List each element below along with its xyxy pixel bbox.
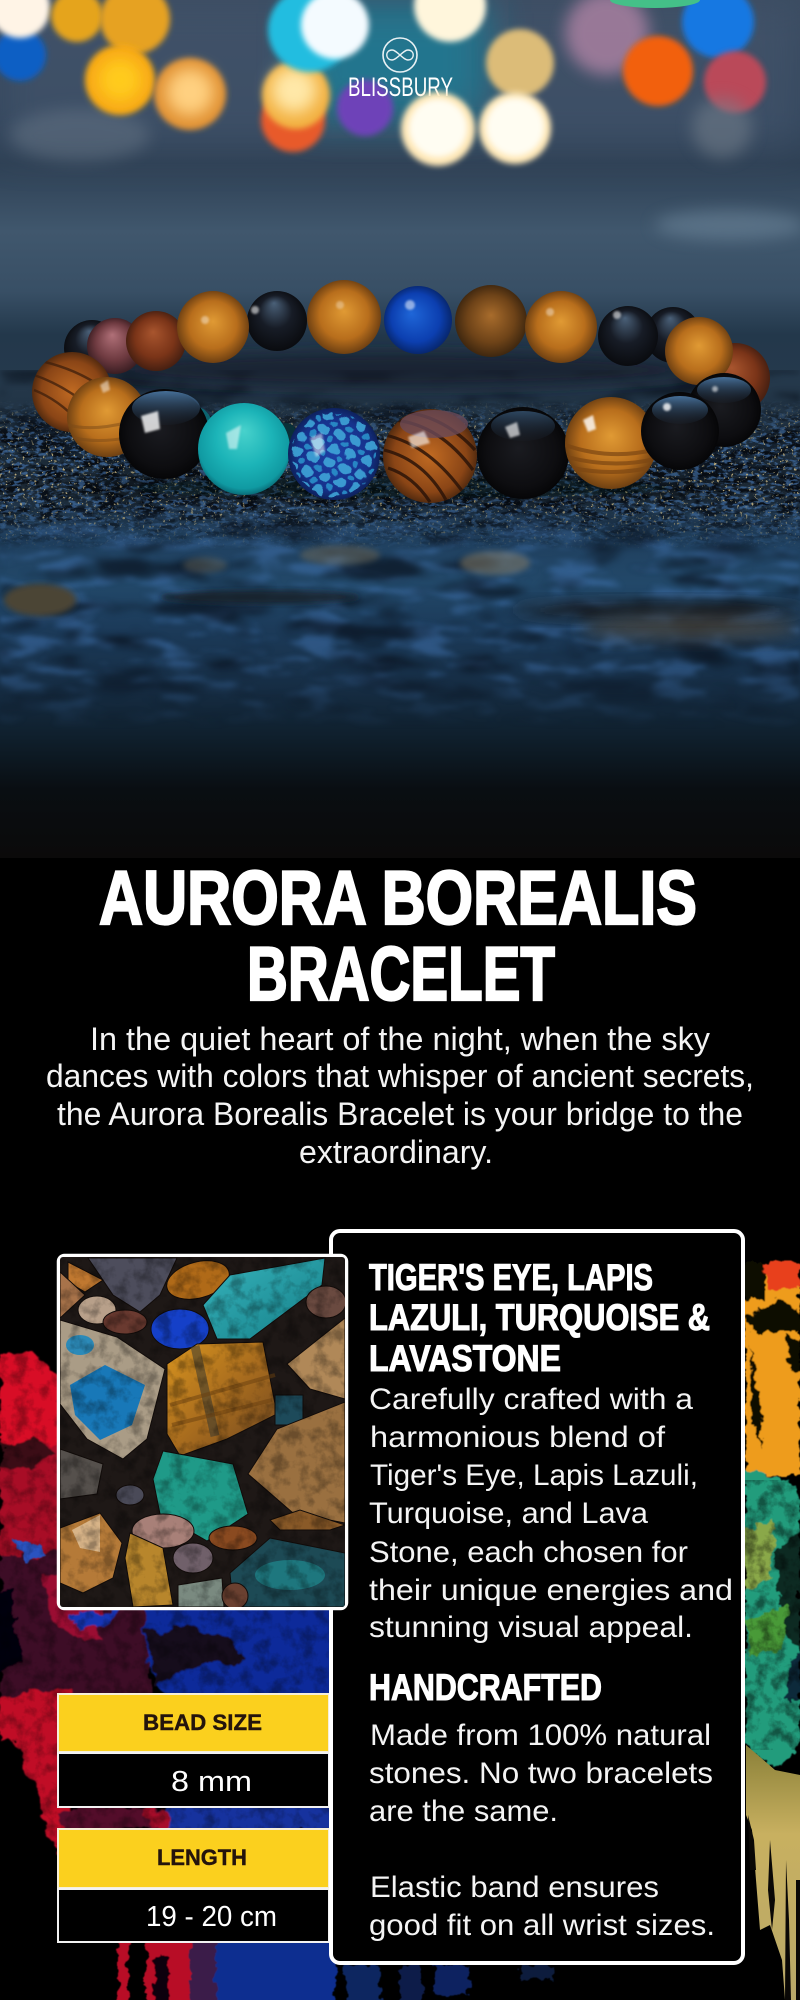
paint splatter: right orange, green, yellow drips — [745, 1262, 800, 2000]
heading: handcrafted: HANDCRAFTED — [369, 1667, 602, 1708]
logo: Blissbury — [348, 38, 453, 102]
text: handcrafted description — [369, 1719, 715, 1942]
heading: stones — [369, 1257, 710, 1379]
panel: description — [331, 1231, 743, 1963]
foreground bokeh lights — [401, 92, 551, 166]
heading: stones: LAZULI, TURQUOISE & — [369, 1297, 710, 1338]
text: stones description: Turquoise, and Lava — [369, 1497, 648, 1530]
drips below spec boxes — [118, 1940, 554, 2000]
text: stones description: Tiger's Eye, Lapis Lazuli, — [370, 1459, 698, 1492]
background bokeh lights — [0, 0, 800, 240]
text: stones description: Stone, each chosen for — [369, 1536, 688, 1569]
text: stones description: stunning visual appeal. — [369, 1611, 693, 1644]
intro paragraph: extraordinary. — [299, 1134, 493, 1170]
text: stones description: their unique energies and — [369, 1574, 733, 1607]
text: handcrafted description: are the same. — [369, 1795, 558, 1828]
paint splatter: left red and blue — [0, 1345, 554, 2000]
title — [99, 856, 697, 1017]
bracelet beads — [32, 280, 770, 503]
spec box: bead size: BEAD SIZE — [143, 1710, 262, 1735]
spec box: bead size — [58, 1694, 329, 1807]
intro paragraph: In the quiet heart of the night, when the sky — [90, 1021, 710, 1057]
intro paragraph — [46, 1021, 754, 1170]
text: handcrafted description: good fit on all wrist sizes. — [369, 1909, 715, 1942]
intro paragraph: the Aurora Borealis Bracelet is your bridge to the — [57, 1096, 743, 1132]
bead highlights — [100, 300, 718, 457]
hero photo: bracelet on stone — [0, 0, 800, 858]
logo: Blissbury: BLISSBURY — [348, 72, 453, 102]
heading: stones: TIGER'S EYE, LAPIS — [369, 1257, 653, 1298]
spec box: length: LENGTH — [157, 1845, 247, 1870]
stone ground texture — [0, 352, 800, 730]
panel edge over spec boxes — [329, 1680, 333, 1950]
spec box: length: 19 - 20 cm — [146, 1901, 277, 1933]
intro paragraph: dances with colors that whisper of ancient secrets, — [46, 1058, 754, 1094]
text: handcrafted description: Made from 100% natural — [370, 1719, 711, 1752]
spec box: length — [58, 1829, 329, 1942]
title: BRACELET — [247, 932, 555, 1017]
text: stones description: harmonious blend of — [370, 1421, 666, 1454]
text: handcrafted description: Elastic band ensures — [370, 1871, 659, 1904]
photo: raw gemstones — [58, 1254, 346, 1609]
text: stones description: Carefully crafted with a — [369, 1383, 693, 1416]
text: handcrafted description: stones. No two bracelets — [369, 1757, 713, 1790]
text: stones description — [369, 1383, 733, 1644]
heading: stones: LAVASTONE — [369, 1338, 561, 1379]
spec box: bead size: 8 mm — [171, 1766, 252, 1798]
